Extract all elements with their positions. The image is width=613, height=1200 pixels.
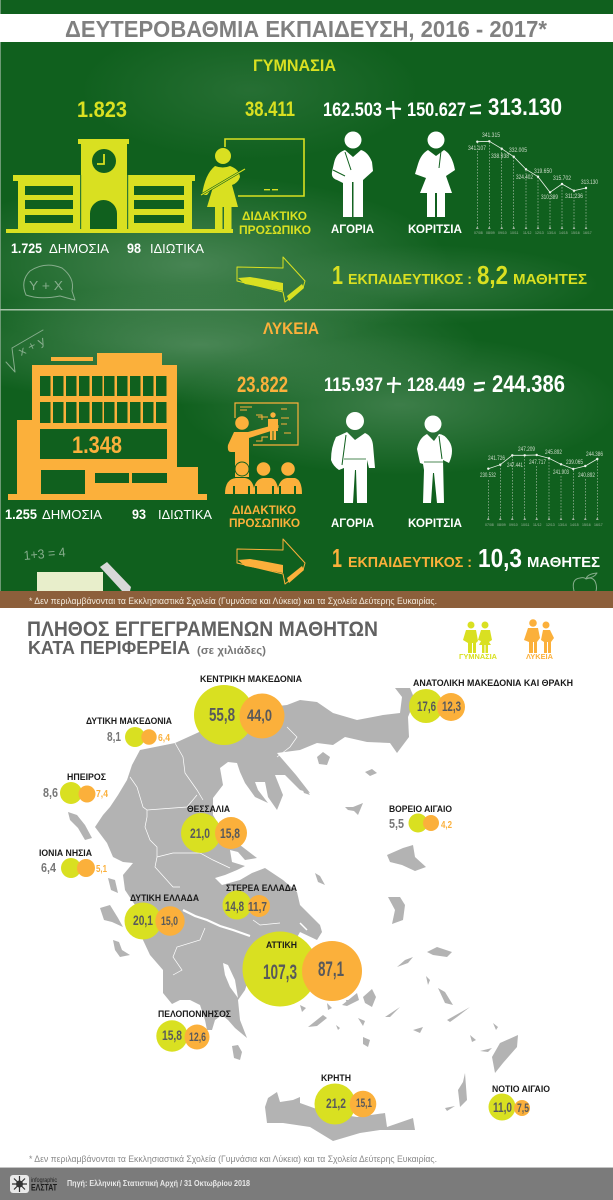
data: ipeiros: 7,4 [96,788,108,800]
line chart: lykeia students by year: 245.892 [545,450,563,456]
ratio: teacher to students: 10,3 [478,543,522,573]
line chart: gymnasia students by year: 341.107 [468,146,487,152]
data: peloponnisos [156,1009,231,1052]
data: peloponnisos: ΠΕΛΟΠΟΝΝΗΣΟΣ [158,1009,231,1020]
heading: students per region [27,617,378,658]
data: ionia nisia [39,848,107,878]
title: ΔΕΥΤΕΡΟΒΑΘΜΙΑ ΕΚΠΑΙΔΕΥΣΗ, 2016 - 2017* [65,16,547,42]
logo: elstat: infographic [31,1177,58,1184]
data: dytiki ellada: 20,1 [133,912,153,928]
line chart: lykeia students by year: 16/17 [594,523,603,527]
map: islands [68,752,518,1141]
chalk doodle: speech bubble [24,265,75,300]
map of Greece [68,688,518,1141]
data: voreio aigaio: ΒΟΡΕΙΟ ΑΙΓΑΙΟ [389,804,452,815]
line chart: lykeia students by year: 13/14 [558,523,567,527]
label: public and private schools [5,506,212,522]
line chart: lykeia students by year: 14/15 [570,523,579,527]
line chart: gymnasia students by year: 15/16 [571,231,580,235]
line chart: gymnasia students by year: 08/09 [486,231,495,235]
line chart: lykeia students by year: 240.892 [578,473,596,479]
icon: girl student [415,132,455,217]
icon: teacher at blackboard [201,139,304,229]
icon: teacher with class [225,403,302,494]
data: kriti: ΚΡΗΤΗ [321,1073,351,1084]
line chart: gymnasia students by year: 12/13 [535,231,544,235]
equation: students total: 313.130 [488,94,562,121]
line chart: lykeia students by year: 11/12 [533,523,542,527]
data: kriti: 21,2 [326,1095,346,1111]
line chart: lykeia students by year: 10/11 [521,523,530,527]
footnote bar [0,591,613,608]
ratio: teacher to students [332,260,587,290]
line chart: lykeia students by year: 12/13 [546,523,555,527]
chalk doodle: square root [6,330,47,372]
footnote: * Δεν περιλαμβάνονται τα Εκκλησιαστικά Σχολεία (Γυμνάσια και Λύκεια) και τα Σχολεία Δεύτερης Ευκαιρίας. [29,1154,437,1164]
line chart: gymnasia students by year: 09/10 [498,231,507,235]
label: teaching staff: ΠΡΟΣΩΠΙΚΟ [229,518,300,530]
footnote bar: * Δεν περιλαμβάνονται τα Εκκλησιαστικά Σχολεία (Γυμνάσια και Λύκεια) και τα Σχολεία Δεύτερης Ευκαιρίας. [29,596,437,606]
data: thessalia [181,804,247,853]
icon: boy student [331,412,375,503]
data: ionia nisia: 6,4 [41,860,57,875]
line chart: gymnasia students by year: 13/14 [547,231,556,235]
data: dytiki makedonia: 8,1 [107,729,121,744]
data: notio aigaio [488,1084,550,1120]
logo: elstat: ΕΛΣΤΑΤ [31,1182,57,1192]
data: kentriki makedonia: 55,8 [209,705,235,725]
label: teaching staff: ΔΙΔΑΚΤΙΚΟ [242,211,307,223]
chalk doodle: speech bubble: Y + X [29,278,63,293]
line chart: lykeia students by year: 08/09 [497,523,506,527]
equation: students total: 150.627 [407,99,466,121]
equation: students total [324,371,565,398]
line chart: lykeia students by year: 15/16 [582,523,591,527]
line chart: lykeia students by year: 247.441 [507,463,523,469]
equation: students total [323,94,562,121]
number: teachers: 38.411 [245,98,295,121]
data: peloponnisos: 15,8 [162,1027,182,1043]
map: gulfs [183,910,250,936]
legend: gymnasia [459,622,498,661]
label: boys: ΑΓΟΡΙΑ [331,222,374,236]
data: dytiki ellada [124,893,199,940]
data: notio aigaio: 7,5 [517,1101,529,1115]
line chart: gymnasia students by year: 10/11 [510,231,519,235]
data: attiki [242,932,362,1006]
ratio: teacher to students: 8,2 [477,260,508,290]
line chart: gymnasia students by year: 07/08 [474,231,483,235]
data: peloponnisos: 12,6 [189,1030,206,1044]
heading: students per region: ΠΛΗΘΟΣ ΕΓΓΕΓΡΑΜΕΝΩΝ ΜΑΘΗΤΩΝ [27,617,378,641]
icon: school building [6,139,233,233]
data: kriti [314,1073,376,1124]
label: teaching staff: ΠΡΟΣΩΠΙΚΟ [239,225,311,237]
label: teaching staff [239,211,311,237]
data: voreio aigaio: 4,2 [441,819,452,831]
data: kentriki makedonia: ΚΕΝΤΡΙΚΗ ΜΑΚΕΔΟΝΙΑ [200,674,302,685]
data: ipeiros: 8,6 [43,785,58,800]
line chart: gymnasia students by year: 16/17 [583,231,592,235]
line chart: lykeia students by year: 239.065 [566,460,584,466]
legend: gymnasia: ΓΥΜΝΑΣΙΑ [459,652,498,661]
label: public and private schools: 98 [127,240,141,256]
label: public and private schools: 1.725 [11,240,42,256]
data: anatoliki makedonia kai thraki: 12,3 [442,698,461,714]
label: boys: ΑΓΟΡΙΑ [331,516,374,530]
label: public and private schools [11,240,204,256]
data: anatoliki makedonia kai thraki: 17,6 [417,698,436,714]
ratio: teacher to students: 1 [332,260,343,290]
ratio: teacher to students [332,543,600,573]
data: kentriki makedonia: 44,0 [247,706,272,725]
line chart: lykeia students by year: 247.717 [529,460,547,466]
equation: students total: 244.386 [492,371,565,398]
data: dytiki ellada: ΔΥΤΙΚΗ ΕΛΛΑΔΑ [130,893,199,904]
number: schools: 1.823 [77,97,127,122]
line chart: lykeia students by year: 09/10 [509,523,518,527]
line chart: lykeia students by year: 244.386 [586,452,604,458]
ratio: teacher to students: 1 [332,543,342,573]
equation: students total: 115.937 [324,374,383,396]
line chart: lykeia students by year: 247.209 [518,447,536,453]
map: mainland [95,688,415,1038]
data: sterea ellada: 14,8 [225,898,244,914]
line chart: gymnasia students by year: 14/15 [559,231,568,235]
line chart: gymnasia students by year: 11/12 [523,231,532,235]
data: sterea ellada: 11,7 [248,899,267,914]
equation: students total: 128.449 [407,374,465,396]
data: ionia nisia: ΙΟΝΙΑ ΝΗΣΙΑ [39,848,92,859]
legend: lykeia [524,619,554,661]
line chart: gymnasia students by year: 332.005 [509,148,528,154]
title band [0,14,613,42]
label: public and private schools: ΙΔΙΩΤΙΚΑ [150,241,204,256]
data: notio aigaio: 11,0 [493,1099,512,1115]
footer bar [0,1167,613,1200]
data: anatoliki makedonia kai thraki [409,678,573,723]
icon: eraser and chalk [37,562,131,591]
icon: boy student [332,132,373,217]
heading: lykeia: ΛΥΚΕΙΑ [263,320,319,338]
data: attiki: 87,1 [318,958,344,981]
label: public and private schools: ΔΗΜΟΣΙΑ [49,241,109,256]
data: ionia nisia: 5,1 [96,863,107,875]
heading: students per region: (σε χιλιάδες) [197,645,266,657]
icon: lyceum building [8,353,207,500]
data: dytiki ellada: 15,0 [161,914,178,928]
line chart: gymnasia students by year: 311.236 [565,194,584,200]
panel: chalkboard background [0,0,613,591]
line chart: lykeia students by year: 230.532 [480,473,496,479]
data: dytiki makedonia: ΔΥΤΙΚΗ ΜΑΚΕΔΟΝΙΑ [86,716,172,727]
data: kriti: 15,1 [356,1096,372,1110]
chalk doodle: sum: 1+3 = 4 [23,544,66,563]
map: region borders [130,727,297,975]
data: attiki: 107,3 [263,961,297,984]
data: ipeiros: ΗΠΕΙΡΟΣ [67,772,106,783]
data: sterea ellada [222,883,297,920]
label: teaching staff [229,505,300,530]
icon: chalk arrow [237,539,305,584]
legend: lykeia: ΛΥΚΕΙΑ [526,652,554,661]
line chart: gymnasia students by year: 319.650 [534,169,553,175]
number: schools: 1.348 [72,432,122,459]
line chart: lykeia students by year: 241.726 [488,456,506,462]
data: dytiki makedonia [86,716,172,747]
label: teaching staff: ΔΙΔΑΚΤΙΚΟ [232,505,296,517]
data: thessalia: 15,8 [220,825,240,841]
line chart: gymnasia students by year: 341.315 [482,133,501,139]
label: public and private schools: ΙΔΙΩΤΙΚΑ [158,507,212,522]
chalk doodle: apple [573,573,597,591]
label: girls: ΚΟΡΙΤΣΙΑ [408,222,462,236]
line chart: gymnasia students by year: 310.389 [541,195,559,201]
data: thessalia: ΘΕΣΣΑΛΙΑ [187,804,230,815]
source: Πηγή: Ελληνική Στατιστική Αρχή / 31 Οκτωβρίου 2018 [67,1179,250,1188]
data: thessalia: 21,0 [190,825,210,841]
label: public and private schools: ΔΗΜΟΣΙΑ [42,507,102,522]
label: public and private schools: 1.255 [5,506,37,522]
line chart: lykeia students by year [480,447,604,527]
ratio: teacher to students: ΜΑΘΗΤΕΣ [513,271,587,288]
data: voreio aigaio: 5,5 [389,816,404,831]
data: notio aigaio: ΝΟΤΙΟ ΑΙΓΑΙΟ [492,1084,550,1095]
data: kentriki makedonia [194,674,302,745]
equation: students total: 162.503 [323,99,382,121]
panel: lykeia [5,320,604,591]
data: anatoliki makedonia kai thraki: ΑΝΑΤΟΛΙΚΗ ΜΑΚΕΔΟΝΙΑ ΚΑΙ ΘΡΑΚΗ [413,678,573,689]
data: attiki: ΑΤΤΙΚΗ [266,940,297,951]
chalk doodle: square root: x + y [16,333,47,359]
line chart: gymnasia students by year: 315.702 [553,176,572,182]
data: voreio aigaio [389,804,452,832]
line chart: lykeia students by year: 241.903 [553,470,569,476]
icon: girl student [417,416,452,503]
line chart: gymnasia students by year: 324.402 [516,175,534,181]
data: ipeiros [43,772,108,804]
line chart: gymnasia students by year [468,133,599,235]
ratio: teacher to students: ΕΚΠΑΙΔΕΥΤΙΚΟΣ : [348,554,472,571]
logo: elstat [10,1175,58,1193]
line chart: gymnasia students by year: 313.130 [581,180,599,186]
number: teachers: 23.822 [237,372,288,397]
panel: gymnasia [6,57,599,302]
label: public and private schools: 93 [132,506,146,522]
heading: gymnasia: ΓΥΜΝΑΣΙΑ [253,57,336,75]
icon: chalk arrow [237,257,305,302]
heading: students per region: ΚΑΤΑ ΠΕΡΙΦΕΡΕΙΑ [28,638,190,658]
line chart: lykeia students by year: 07/08 [485,523,494,527]
data: dytiki makedonia: 6,4 [158,732,170,744]
data: sterea ellada: ΣΤΕΡΕΑ ΕΛΛΑΔΑ [226,883,297,894]
ratio: teacher to students: ΜΑΘΗΤΕΣ [527,554,600,571]
label: girls: ΚΟΡΙΤΣΙΑ [408,516,462,530]
ratio: teacher to students: ΕΚΠΑΙΔΕΥΤΙΚΟΣ : [348,271,472,288]
line chart: gymnasia students by year: 338.938 [491,154,510,160]
